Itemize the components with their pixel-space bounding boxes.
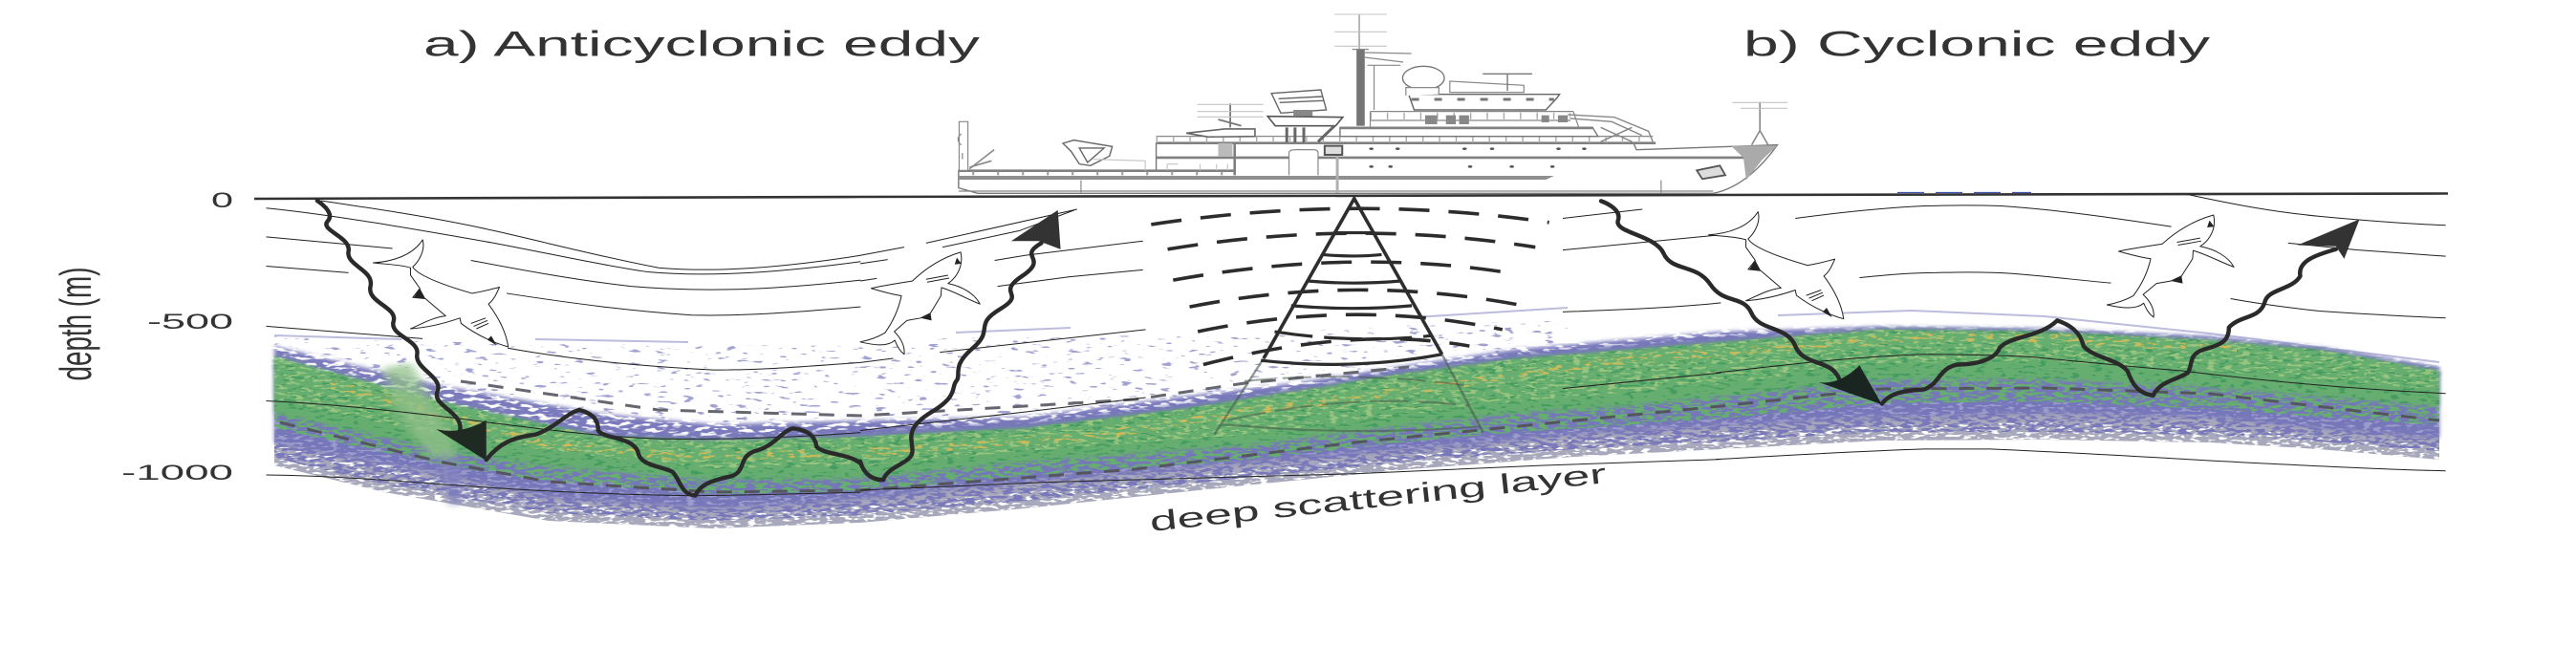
- side portholes: [1369, 132, 1587, 168]
- anchor: [1697, 165, 1725, 179]
- lower zone white specks: [274, 422, 2439, 528]
- scattered speckle above the layer: [274, 320, 1568, 422]
- shark tracks and arrows, centre: [860, 210, 1061, 480]
- stern crane arm: [969, 150, 994, 169]
- deck windows: [1425, 116, 1568, 124]
- green core band: [274, 330, 2439, 480]
- lower dashed layer line: [280, 388, 2439, 492]
- green dark speckle: [274, 330, 2439, 480]
- hatched stairway: [1218, 143, 1232, 157]
- shark: right eddy ascending: [2107, 215, 2234, 317]
- axis: depth labels: [53, 188, 233, 484]
- shark tracks and arrows, left eddy: [317, 201, 860, 496]
- lifeboat: [1267, 117, 1343, 126]
- shark: left eddy descending: [373, 240, 509, 347]
- density isolines, left eddy: [266, 201, 860, 496]
- density isolines, centre: [860, 209, 1721, 490]
- vertical bubble wisp, upper green part: [382, 363, 457, 459]
- green fringe fading into purple: [274, 330, 2439, 494]
- dark vent: [1325, 146, 1342, 155]
- radar dome: [1402, 66, 1444, 90]
- fore crane and frame: [1568, 115, 1653, 141]
- yellow peak signal streak: [330, 337, 2237, 457]
- track: right eddy descent: [1601, 201, 1857, 389]
- cone sides, upper dark portion: [1264, 199, 1442, 358]
- tick label 0: 0: [211, 188, 233, 212]
- deck rails: [1157, 116, 1653, 140]
- faint top edge of echogram: [274, 308, 2439, 362]
- hull: [959, 143, 1778, 193]
- aft mast: [1218, 103, 1242, 127]
- stern crane: [1063, 140, 1113, 165]
- bow mast: [1752, 102, 1768, 145]
- aft deck house lines: [1093, 160, 1227, 170]
- surface blue dash marks: [1897, 191, 2031, 193]
- purple band: [274, 328, 2439, 508]
- title: b) Cyclonic eddy: b) Cyclonic eddy: [1743, 25, 2211, 63]
- bridge deck: [1409, 95, 1560, 110]
- purple band lighter speckle: [274, 401, 2439, 508]
- shark: right eddy descending: [1709, 212, 1844, 319]
- shark: left eddy ascending: [860, 252, 980, 355]
- track: left eddy bounce 1: [487, 410, 860, 496]
- sonar beam cone and sound wave arcs: [1151, 199, 1549, 435]
- green pale speckle: [274, 330, 2439, 468]
- vertical bubble wisp, lower lilac part: [438, 459, 463, 506]
- stern post: [958, 121, 968, 170]
- axis title: depth (m): depth (m): [53, 268, 101, 380]
- main mast: [1356, 50, 1365, 126]
- water surface line: [254, 193, 2448, 199]
- door: [1289, 150, 1318, 175]
- lifeboat pillars: [1287, 126, 1334, 142]
- bow grey wedge: [1731, 145, 1778, 180]
- cone sides, lower fading portion: [1214, 355, 1483, 435]
- cone inner arcs, fading into layer: [1223, 377, 1481, 431]
- mid deck: [1340, 127, 1598, 137]
- chart: acoustic backscatter deep scattering layer: [274, 308, 2439, 528]
- tick label -1000: -1000: [121, 461, 233, 484]
- density isolines, right eddy: [1716, 194, 2446, 471]
- arrowhead: left eddy ascent: [1011, 210, 1061, 249]
- lower grey echo zone: [274, 399, 2439, 528]
- lower zone purple speckle: [274, 399, 2439, 521]
- track: left eddy ascent: [860, 243, 1041, 480]
- ship: [958, 14, 1787, 193]
- lifeboat davit: [1271, 90, 1327, 113]
- title: a) Anticyclonic eddy: a) Anticyclonic eddy: [423, 25, 981, 63]
- arrowhead: descent: [436, 420, 487, 461]
- arrowhead: right eddy descent: [1819, 365, 1882, 404]
- track: left eddy descent: [317, 201, 461, 430]
- cone inner arcs: [1261, 233, 1442, 364]
- aft mast platform: [1186, 129, 1255, 137]
- outer dashed sound wave fronts: [1151, 208, 1549, 365]
- bridge antenna: [1483, 74, 1532, 91]
- hull stripes and deck lines: [959, 137, 1746, 193]
- arrowhead: right eddy ascent: [2298, 219, 2360, 259]
- shark tracks and arrows, right eddy: [1601, 201, 2360, 404]
- track: right eddy bounce: [1882, 249, 2336, 403]
- tick label -500: -500: [147, 310, 233, 334]
- upper scattered purple fringe: [274, 327, 2439, 453]
- upper dashed layer line: [461, 367, 1409, 416]
- label: deep scattering layer: deep scattering layer: [1148, 459, 1609, 538]
